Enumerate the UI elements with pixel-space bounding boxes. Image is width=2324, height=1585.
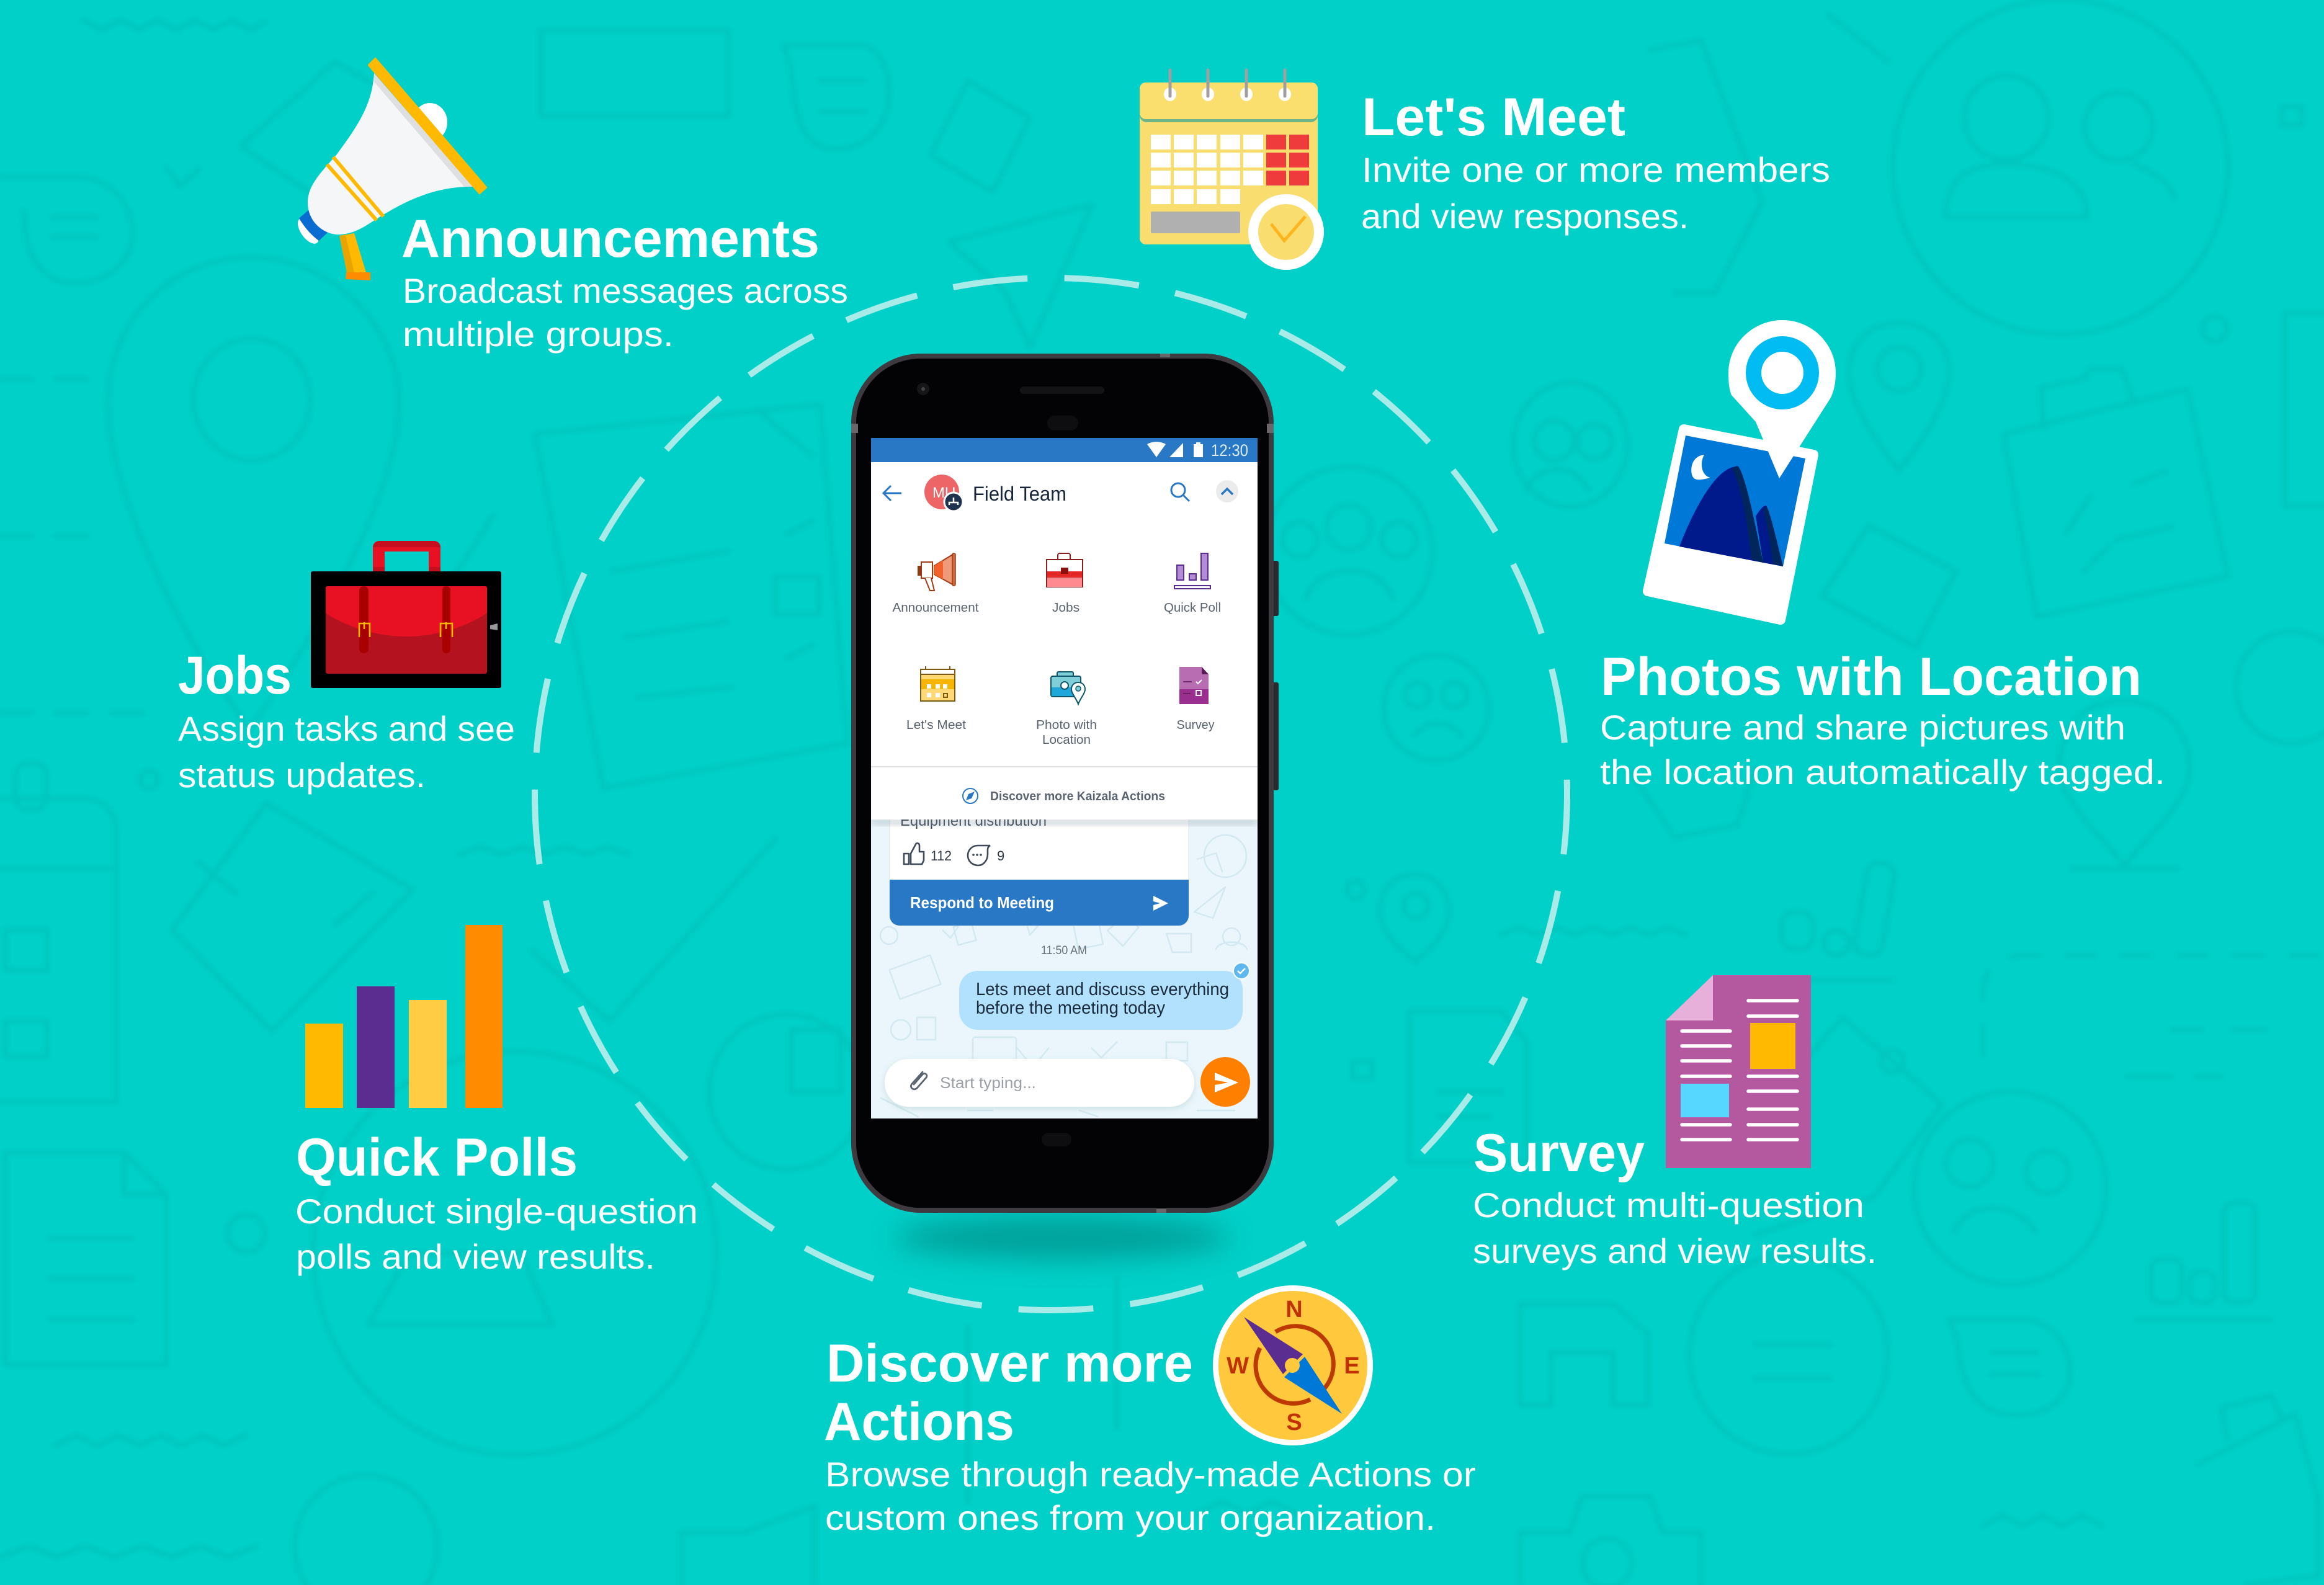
action: Let's Meet: Let's Meet — [906, 718, 966, 732]
description: custom ones from your organization. — [825, 1498, 1436, 1537]
action: Photo with Location — [1036, 672, 1097, 747]
description — [178, 709, 515, 795]
respond button: Respond to Meeting — [910, 893, 1054, 912]
action: Photo with Location: Photo with — [1036, 718, 1097, 732]
like icon and count: 112 — [931, 848, 952, 864]
chat wallpaper — [871, 806, 1258, 1118]
description — [1600, 708, 2165, 792]
action: Quick Poll — [1164, 553, 1221, 615]
chat header: MU — [932, 484, 955, 501]
description: Conduct single-question — [295, 1192, 698, 1231]
heading — [824, 1334, 1193, 1452]
icon: survey document — [1666, 975, 1811, 1168]
action: Jobs — [1047, 553, 1083, 615]
description — [825, 1455, 1476, 1537]
send button — [1200, 1057, 1250, 1107]
phone body — [854, 356, 1271, 1210]
icon: compass: S — [1286, 1409, 1302, 1435]
feature: Survey — [1473, 975, 1877, 1270]
description — [403, 271, 848, 354]
respond button — [890, 880, 1189, 926]
description: the location automatically tagged. — [1600, 752, 2165, 792]
feature: Let's Meet — [1140, 70, 1830, 270]
action: Announcement: Announcement — [892, 601, 979, 615]
feature: Discover more Actions — [824, 1285, 1476, 1537]
heading: Let's Meet — [1362, 87, 1625, 147]
chat header — [883, 475, 1238, 511]
description — [1361, 150, 1830, 236]
message input: Start typing... — [940, 1074, 1036, 1092]
description: surveys and view results. — [1473, 1231, 1877, 1270]
icon: bar chart — [305, 925, 503, 1108]
heading: Actions — [824, 1392, 1014, 1452]
chat bubble: before the meeting today — [976, 998, 1165, 1018]
icon: photo with pin — [1648, 320, 1836, 620]
description: Capture and share pictures with — [1600, 708, 2125, 747]
action: Announcement — [892, 553, 979, 615]
description: Browse through ready-made Actions or — [825, 1455, 1476, 1494]
description — [1473, 1185, 1877, 1270]
description: polls and view results. — [296, 1237, 655, 1276]
description: Assign tasks and see — [178, 709, 515, 748]
dashed ring around phone — [522, 265, 1580, 1323]
heading: Quick Polls — [296, 1128, 578, 1187]
message input — [885, 1059, 1194, 1109]
feature: Photos with Location — [1600, 320, 2165, 792]
icon: compass — [1213, 1285, 1373, 1445]
feature: Quick Polls — [295, 925, 698, 1276]
heading: Jobs — [178, 646, 292, 705]
heading: Announcements — [401, 209, 820, 269]
chat bubble — [959, 963, 1249, 1030]
icon: compass: W — [1227, 1353, 1249, 1379]
feature: Jobs — [178, 541, 515, 795]
phone screen — [871, 438, 1258, 1118]
description: Invite one or more members — [1362, 150, 1830, 189]
discover more link: Discover more Kaizala Actions — [990, 789, 1165, 803]
comment icon and count — [968, 846, 1004, 865]
phone side buttons — [1272, 561, 1279, 790]
chat wallpaper doodles — [880, 835, 1247, 1117]
icon: compass: N — [1285, 1297, 1303, 1323]
action: Let's Meet — [906, 666, 966, 732]
card title cut off by panel: Equipment distribution — [900, 812, 1047, 829]
heading: Discover more — [826, 1334, 1193, 1393]
status bar — [871, 438, 1258, 462]
description: status updates. — [178, 756, 426, 795]
icon: calendar — [1140, 70, 1324, 270]
message card — [890, 819, 1189, 926]
icon: briefcase — [311, 541, 501, 688]
action: Quick Poll: Quick Poll — [1164, 601, 1221, 615]
chat bubble: Lets meet and discuss everything — [976, 980, 1229, 999]
feature: Announcements — [293, 59, 848, 354]
action: Jobs: Jobs — [1052, 601, 1079, 615]
description: Conduct multi-question — [1473, 1185, 1864, 1225]
phone mockup — [851, 354, 1279, 1213]
heading: Survey — [1473, 1123, 1645, 1183]
actions panel — [871, 438, 1258, 824]
phone hardware details — [851, 354, 1274, 1213]
status bar: 12:30 — [1211, 441, 1248, 460]
comment icon and count: 9 — [997, 848, 1004, 864]
timestamp: 11:50 AM — [1041, 944, 1087, 957]
action: Survey — [1176, 667, 1215, 732]
action: Photo with Location: Location — [1042, 733, 1091, 747]
action: Survey: Survey — [1176, 718, 1215, 732]
icon: compass: E — [1344, 1353, 1360, 1379]
chat header: Field Team — [973, 483, 1066, 505]
icon: megaphone — [293, 59, 486, 280]
heading: Photos with Location — [1601, 647, 2142, 707]
description: and view responses. — [1361, 197, 1689, 236]
description: multiple groups. — [403, 315, 674, 354]
description: Broadcast messages across — [403, 271, 848, 310]
like icon and count — [904, 843, 952, 864]
phone shadow — [895, 1217, 1230, 1259]
description — [295, 1192, 698, 1276]
